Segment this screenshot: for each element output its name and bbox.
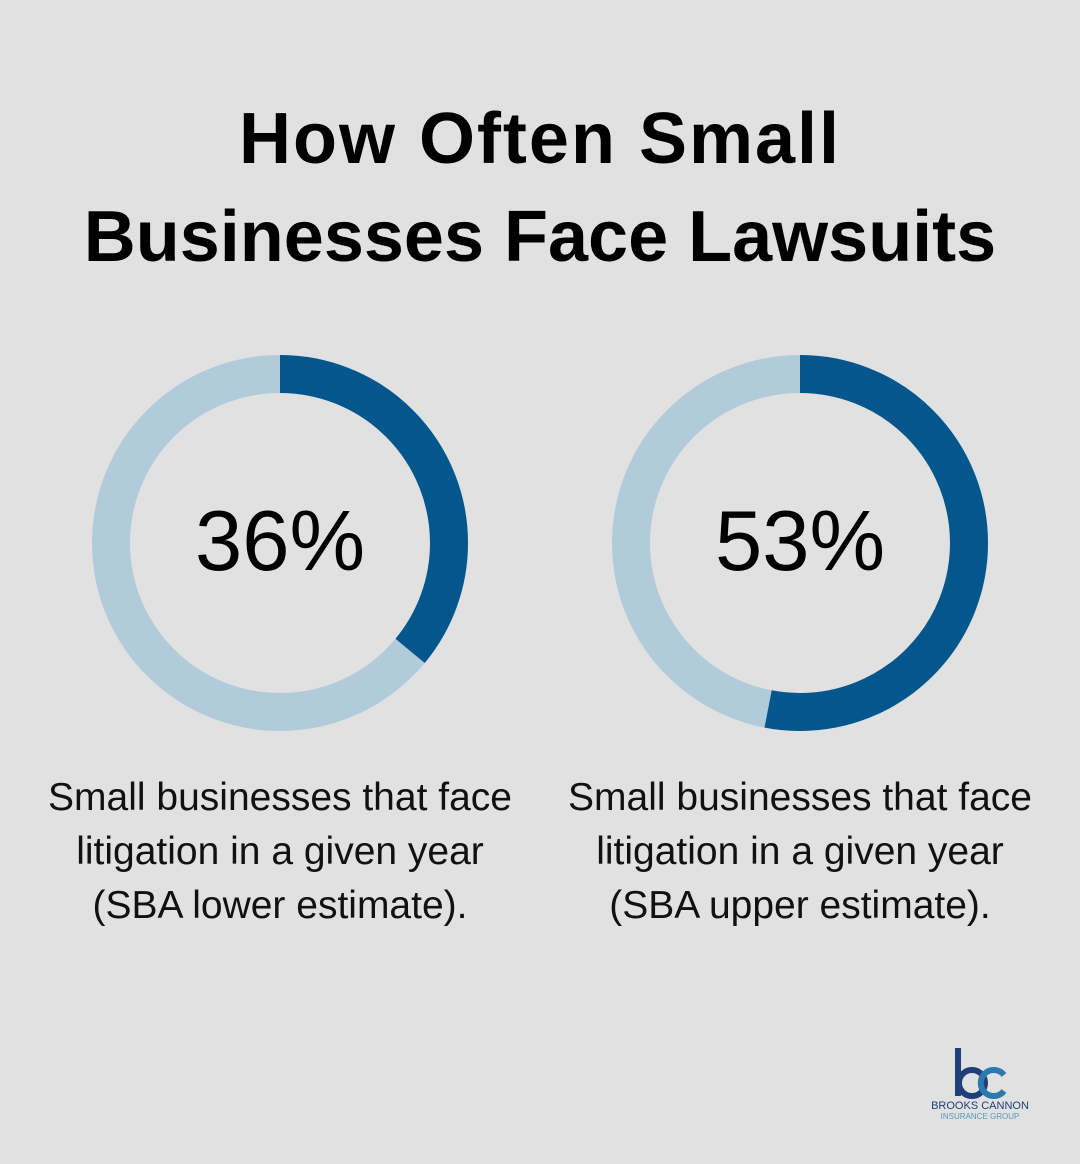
caption right: Small businesses that face bbox=[568, 776, 1032, 819]
title: Businesses Face Lawsuits bbox=[84, 197, 996, 277]
logo bbox=[931, 1048, 1029, 1121]
caption right: (SBA upper estimate). bbox=[609, 884, 991, 927]
caption right: litigation in a given year bbox=[596, 830, 1004, 873]
logo: INSURANCE GROUP bbox=[941, 1112, 1019, 1121]
caption left bbox=[48, 776, 512, 927]
logo: BROOKS CANNON bbox=[931, 1100, 1029, 1112]
donut chart: 53%: 53% bbox=[715, 494, 885, 589]
title: How Often Small bbox=[239, 99, 841, 179]
caption right bbox=[568, 776, 1032, 927]
caption left: Small businesses that face bbox=[48, 776, 512, 819]
caption left: litigation in a given year bbox=[76, 830, 484, 873]
title bbox=[84, 99, 996, 277]
caption left: (SBA lower estimate). bbox=[93, 884, 467, 927]
donut chart: 36%: 36% bbox=[195, 494, 365, 589]
